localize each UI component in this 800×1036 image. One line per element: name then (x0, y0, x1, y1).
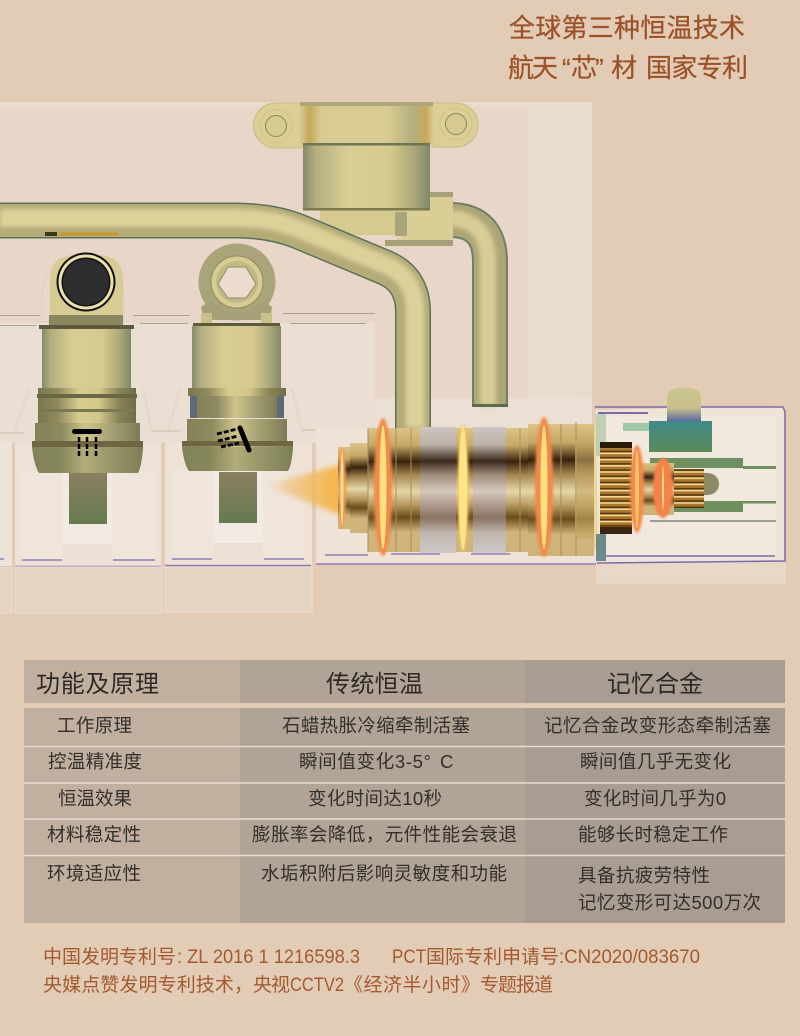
table row: material stability: 膨胀率会降低，元件性能会衰退 (252, 824, 517, 845)
valve: middle outlet with hand-shower icon (182, 244, 293, 523)
table row: environmental adaptability: 具备抗疲劳特性 (578, 865, 710, 886)
table row: material stability: 能够长时稳定工作 (578, 824, 728, 845)
valve: left outlet with shower-head icon (32, 252, 143, 524)
table row: material stability (47, 824, 728, 845)
lug: right (432, 103, 478, 147)
panel: translucent valve housing (0, 102, 592, 443)
footer patent text: :CN2020/083670 (559, 947, 700, 968)
lug: left (254, 103, 302, 148)
table row: working principle (57, 715, 771, 736)
table row: temperature accuracy: 瞬间值变化3-5° (299, 751, 431, 772)
table row: temperature accuracy: 瞬间值几乎无变化 (580, 751, 731, 772)
table header: 功能及原理 (36, 671, 159, 698)
table row: temperature accuracy: 控温精准度 (48, 751, 142, 772)
small gear (672, 469, 704, 508)
glowing rings (338, 417, 673, 557)
table row: environmental adaptability: 环境适应性 (47, 863, 141, 884)
table header (36, 671, 703, 698)
footer patent text (43, 946, 700, 996)
flame (265, 465, 340, 515)
footer patent text: PCT (392, 947, 426, 968)
table header: 记忆合金 (607, 671, 703, 698)
footer patent text: 专题报道 (480, 974, 553, 996)
ring 0 (338, 448, 346, 528)
table row: environmental adaptability: 记忆变形可达500万次 (578, 892, 761, 913)
footer patent text: 央视 (253, 974, 290, 996)
ring 5 (653, 458, 673, 518)
ring 3 (535, 417, 553, 557)
footer patent text: 《经济半小时》 (344, 974, 480, 996)
small pin (704, 473, 719, 495)
title: ” (595, 53, 604, 83)
table row: working principle: 石蜡热胀冷缩牵制活塞 (282, 715, 470, 736)
footer patent text: 国际专利申请号 (426, 946, 559, 968)
pipe: right brass pipe (450, 218, 508, 407)
table header: 传统恒温 (326, 671, 423, 698)
knob (667, 388, 701, 421)
footer patent text: 中国发明专利号 (43, 946, 176, 968)
stem tab (69, 473, 107, 524)
title (508, 13, 748, 83)
ring 2 (458, 424, 468, 552)
table row: material stability: 材料稳定性 (47, 824, 141, 845)
table column fills (24, 660, 785, 923)
table row: temperature accuracy: C (440, 751, 453, 772)
pipe: main brass pipe (0, 218, 415, 428)
table row: thermostatic effect: 变化时间达10秒 (308, 788, 442, 809)
panel: right transparent housing (595, 388, 785, 583)
panel: lower housing boxes (0, 428, 596, 613)
table row: working principle: 记忆合金改变形态牵制活塞 (544, 715, 771, 736)
stem tab (219, 472, 257, 523)
green inner parts (623, 421, 776, 522)
footer patent text: CCTV2 (290, 975, 344, 996)
table row: working principle: 工作原理 (57, 715, 132, 736)
footer patent text: : ZL 2016 1 1216598.3 (177, 947, 360, 968)
ring 1 (374, 418, 392, 556)
title: 全球第三种恒温技术 (509, 13, 745, 43)
table row: thermostatic effect: 变化时间几乎为0 (584, 788, 726, 809)
comparison table (24, 660, 785, 923)
title: 国家专利 (646, 53, 748, 83)
top valve body (254, 102, 478, 246)
title: “ (562, 53, 571, 83)
title: 芯 (571, 53, 597, 83)
icon: black port ring (56, 252, 116, 312)
cartridge (338, 420, 598, 556)
grey sections (420, 427, 506, 553)
icon: hex socket (218, 267, 256, 298)
table row: environmental adaptability (47, 863, 761, 913)
table row: environmental adaptability: 水垢积附后影响灵敏度和功能 (261, 863, 507, 884)
table row: thermostatic effect: 恒温效果 (58, 788, 132, 809)
title: 航天 (508, 53, 558, 83)
ring 4 (630, 445, 644, 533)
icon: overhead shower (72, 429, 102, 457)
main gear (600, 442, 632, 534)
title: 材 (611, 53, 637, 83)
footer patent text: 央媒点赞发明专利技术， (43, 974, 253, 996)
table row: thermostatic effect (58, 788, 726, 809)
table row: temperature accuracy (48, 751, 731, 772)
icon: hand shower (217, 428, 249, 450)
